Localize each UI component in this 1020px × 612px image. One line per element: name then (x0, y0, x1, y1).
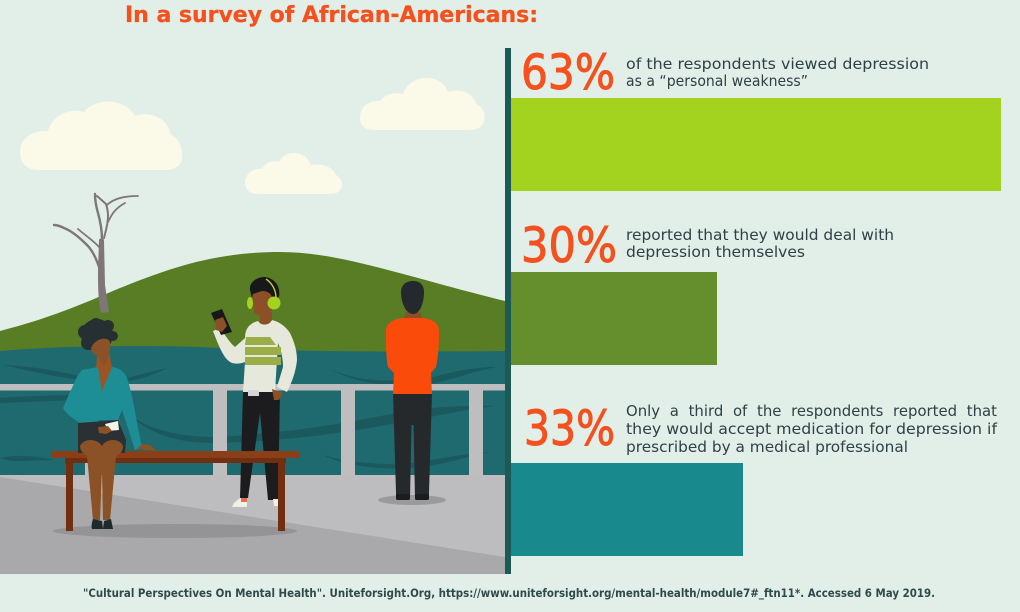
number: 33% (524, 401, 615, 457)
figure: man with headphones and phone (211, 277, 297, 507)
text block (626, 55, 929, 90)
panel: park illustration (0, 78, 505, 574)
text block (626, 226, 894, 261)
icon: bare tree (54, 194, 138, 313)
divider (505, 48, 511, 574)
text block: of the respondents viewed depression (626, 55, 929, 73)
stat 30% (511, 218, 894, 365)
icon: cloud right (360, 78, 485, 130)
stat 63% (511, 45, 1001, 191)
title: In a survey of African-Americans: (125, 3, 538, 28)
text block: Only a third of the respondents reported that (626, 402, 997, 420)
bench (51, 451, 300, 531)
icon: cloud left (20, 102, 182, 170)
text block: reported that they would deal with (626, 226, 894, 244)
text block (626, 402, 998, 456)
bar (511, 463, 743, 556)
ground (0, 475, 505, 574)
source citation: "Cultural Perspectives On Mental Health". Uniteforsight.Org, https://www.uniteforsight.org/mental-health/module7#_ftn11*. Accessed 6 May 2019. (83, 586, 935, 601)
bar (511, 98, 1001, 191)
text block: depression themselves (626, 243, 805, 261)
hill (0, 252, 505, 360)
figure: man in orange from behind (386, 281, 439, 500)
figure: seated woman (63, 318, 157, 529)
text block: they would accept medication for depression if (626, 420, 998, 438)
stat 33% (511, 401, 998, 556)
number: 30% (521, 218, 617, 274)
icon: cloud middle (245, 153, 342, 194)
number: 63% (521, 45, 615, 101)
bar (511, 272, 717, 365)
railing (0, 384, 505, 476)
water ripples (0, 365, 496, 468)
text block: as a “personal weakness” (626, 72, 808, 90)
water (0, 346, 505, 476)
text block: prescribed by a medical professional (626, 438, 908, 456)
ground shadows (53, 524, 297, 538)
